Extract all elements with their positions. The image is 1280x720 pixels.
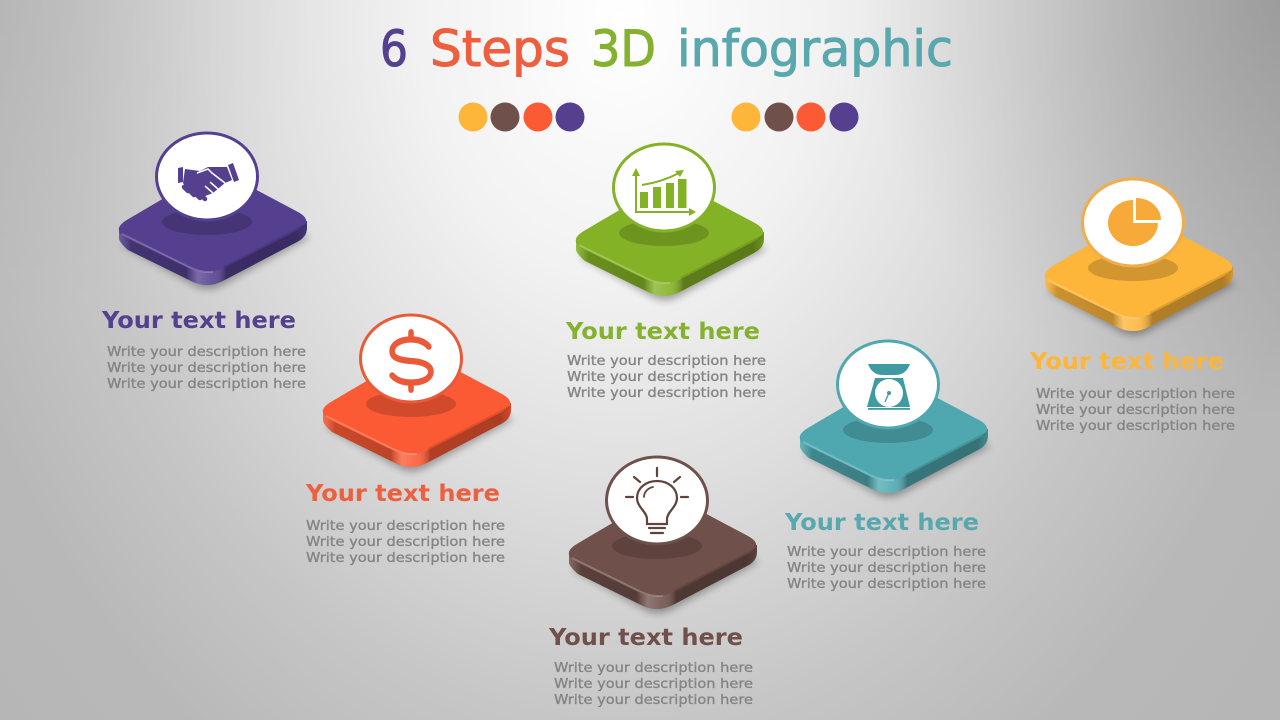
icon: handshake — [178, 163, 239, 199]
description: Write your description here — [107, 345, 306, 360]
description: Write your description here — [554, 677, 753, 692]
tile: green — [576, 144, 766, 300]
step: kitchen scale (teal) — [784, 341, 990, 592]
description: Write your description here — [306, 551, 505, 566]
title: 6 — [380, 20, 408, 78]
description: Write your description here — [567, 386, 766, 401]
description — [107, 345, 306, 392]
decorative dots: left group — [458, 102, 584, 132]
description: Write your description here — [787, 577, 986, 592]
icon: pie chart — [1108, 198, 1161, 246]
icon: dollar sign — [392, 332, 431, 390]
decorative dots: right group — [732, 102, 858, 132]
heading: Your text here — [305, 481, 500, 507]
title — [380, 20, 953, 78]
description — [1036, 387, 1235, 434]
title: 3D — [591, 20, 656, 78]
step: dollar (red) — [305, 315, 513, 566]
description: Write your description here — [554, 661, 753, 676]
heading: Your text here — [784, 510, 979, 536]
description: Write your description here — [787, 561, 986, 576]
description — [554, 661, 753, 708]
tile: teal — [800, 341, 990, 497]
step: chart (green) — [565, 144, 766, 401]
icon: rising bar chart — [632, 168, 696, 216]
description: Write your description here — [107, 361, 306, 376]
description — [306, 519, 505, 566]
tile: purple — [119, 133, 309, 289]
heading: Your text here — [548, 625, 743, 651]
step: pie chart (orange) — [1029, 179, 1235, 434]
tile: red — [323, 315, 513, 471]
description: Write your description here — [787, 545, 986, 560]
step: handshake (purple) — [101, 133, 309, 392]
description: Write your description here — [306, 519, 505, 534]
title: Steps — [430, 20, 570, 78]
tile: orange — [1045, 179, 1235, 335]
title: infographic — [677, 20, 953, 78]
description: Write your description here — [306, 535, 505, 550]
description — [787, 545, 986, 592]
icon: kitchen scale — [867, 364, 910, 410]
description: Write your description here — [567, 370, 766, 385]
step: lightbulb (brown) — [548, 457, 759, 708]
heading: Your text here — [1029, 349, 1224, 375]
description: Write your description here — [567, 354, 766, 369]
description: Write your description here — [107, 377, 306, 392]
description: Write your description here — [1036, 387, 1235, 402]
description: Write your description here — [1036, 419, 1235, 434]
heading: Your text here — [101, 308, 296, 334]
description: Write your description here — [1036, 403, 1235, 418]
icon: lightbulb — [626, 468, 688, 533]
description: Write your description here — [554, 693, 753, 708]
heading: Your text here — [565, 319, 760, 345]
tile: brown — [569, 457, 759, 613]
description — [567, 354, 766, 401]
